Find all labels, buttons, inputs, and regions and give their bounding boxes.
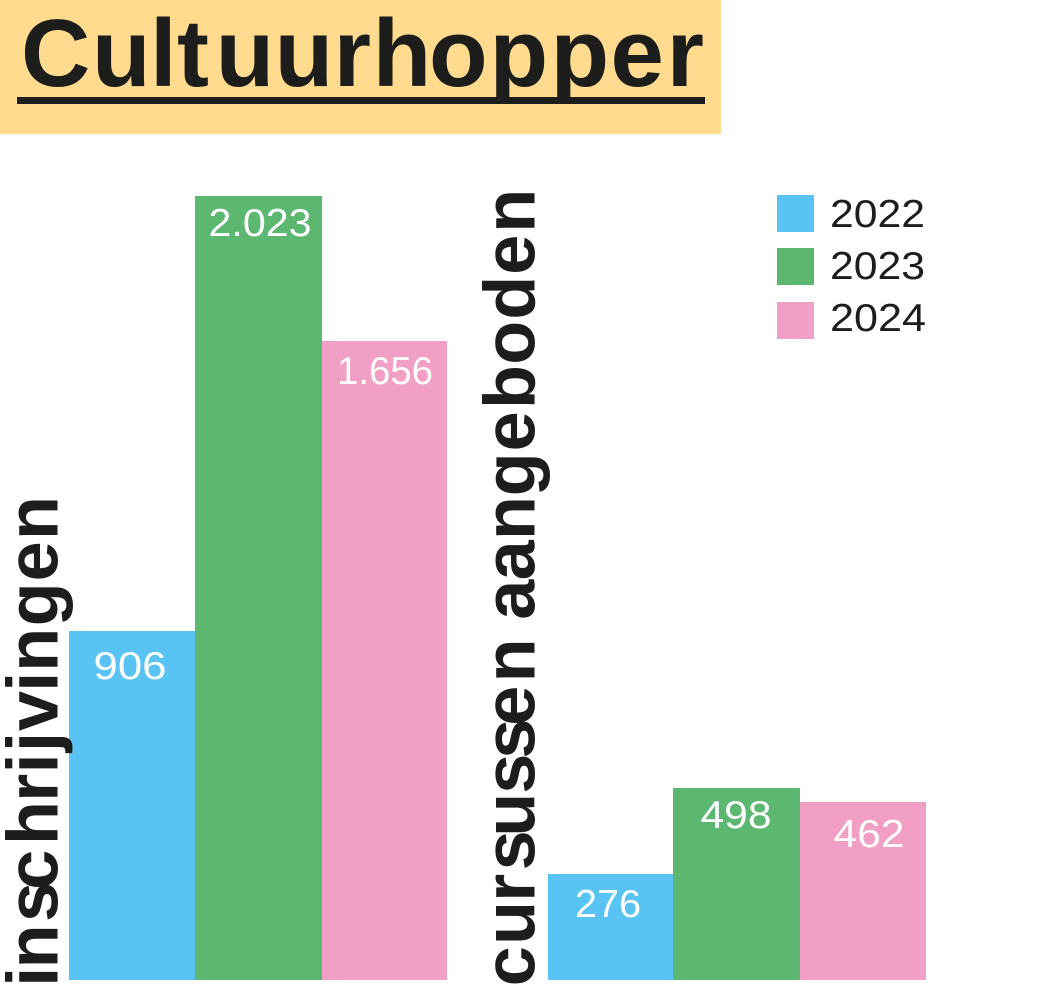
bar: 2024 cursussen: 462 bbox=[834, 813, 904, 856]
title: Cultuurhopper bbox=[21, 0, 704, 107]
legend item: 2022: 2022 bbox=[830, 193, 925, 236]
bar: 2023 cursussen: 498 bbox=[700, 794, 772, 837]
legend item: 2024 bbox=[777, 297, 926, 340]
bar: 2022 cursussen bbox=[548, 874, 673, 980]
bar: 2022 inschrijvingen bbox=[69, 631, 195, 980]
bar: 2023 inschrijvingen: 2.023 bbox=[208, 202, 312, 245]
title banner bbox=[0, 0, 721, 134]
bar: 2022 inschrijvingen: 906 bbox=[94, 645, 166, 688]
legend item: 2024: 2024 bbox=[830, 297, 926, 340]
bar: 2023 cursussen bbox=[673, 788, 800, 980]
legend item: 2023: 2023 bbox=[830, 245, 925, 288]
bar: 2022 cursussen: 276 bbox=[575, 883, 641, 926]
bar: 2024 cursussen bbox=[800, 802, 926, 980]
bar: 2024 inschrijvingen bbox=[322, 341, 447, 980]
legend bbox=[777, 193, 926, 340]
bar: 2024 inschrijvingen: 1.656 bbox=[337, 350, 433, 393]
legend item: 2022 bbox=[777, 193, 925, 236]
bar: 2023 inschrijvingen bbox=[195, 196, 322, 980]
title underline bbox=[17, 97, 705, 104]
legend item: 2023 bbox=[777, 245, 925, 288]
bar chart: inschrijvingen bbox=[0, 196, 447, 984]
bar chart: cursussen aangeboden bbox=[470, 189, 926, 984]
axis label: cursussen aangeboden: cursussen aangeboden bbox=[470, 189, 550, 984]
